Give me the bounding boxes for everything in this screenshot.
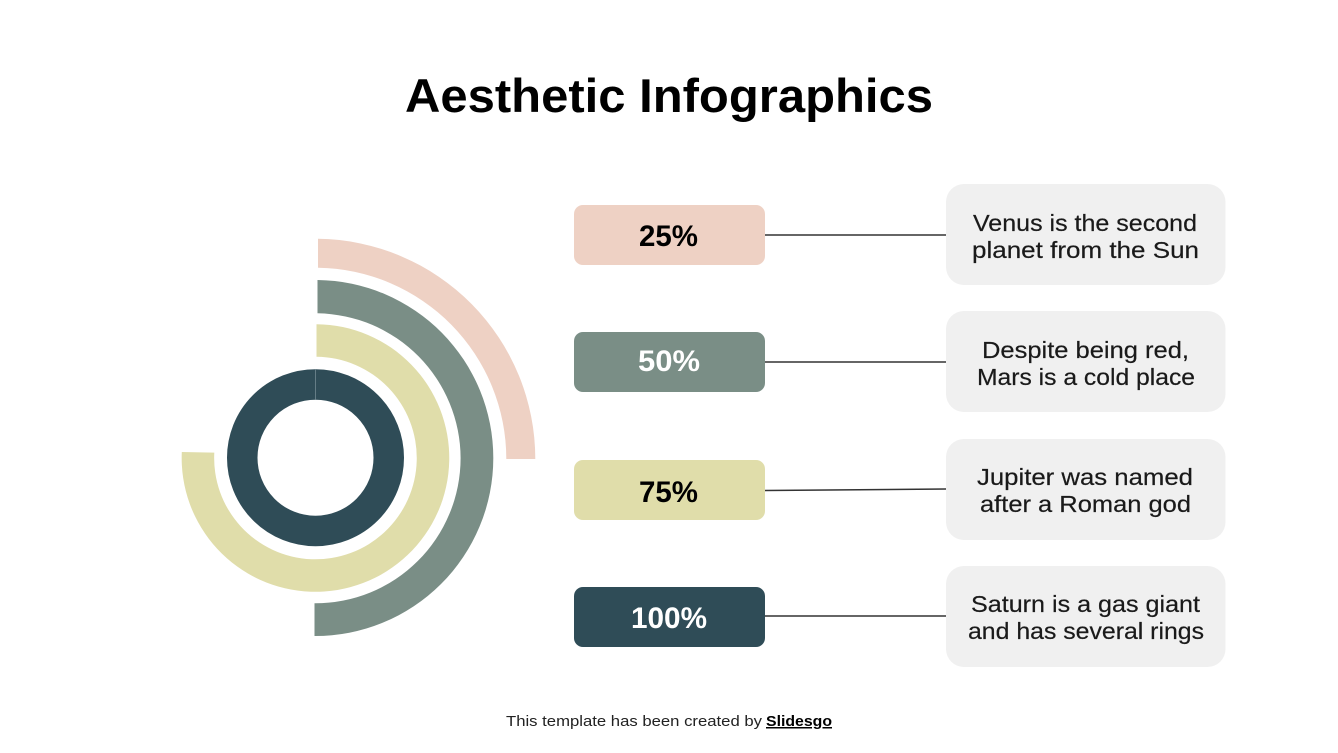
- description text: planet from the Sun: [972, 237, 1199, 263]
- description card: [946, 311, 1226, 412]
- value: 50%: [638, 345, 700, 378]
- value: 75%: [639, 476, 698, 509]
- description text: Saturn is a gas giant: [971, 591, 1201, 617]
- description card: [946, 439, 1226, 540]
- description text: Jupiter was named: [977, 464, 1193, 490]
- description text: after a Roman god: [980, 491, 1191, 517]
- row: 100% Saturn: [574, 566, 1226, 667]
- arc: 75% yellow: [182, 324, 449, 592]
- description text: and has several rings: [968, 618, 1204, 644]
- connector line: [765, 615, 946, 617]
- description text: Venus is the second: [973, 210, 1197, 236]
- description text: Despite being red,: [982, 337, 1189, 363]
- value badge: [574, 460, 765, 520]
- connector line: [765, 234, 946, 236]
- row: 75% Jupiter: [574, 439, 1226, 540]
- connector line: [765, 489, 946, 490]
- title: Aesthetic Infographics: [405, 69, 933, 122]
- value: 25%: [639, 220, 698, 253]
- value badge: [574, 205, 765, 265]
- description card: [946, 184, 1226, 285]
- ring: 100% dark teal: [242, 369, 389, 531]
- description text: Mars is a cold place: [977, 364, 1195, 390]
- footer credit: Slidesgo: [766, 713, 832, 730]
- value badge: [574, 587, 765, 647]
- value badge: [574, 332, 765, 392]
- arc: 50% grey-green: [314, 280, 493, 636]
- row: 25% Venus: [574, 184, 1226, 285]
- value: 100%: [631, 602, 707, 635]
- description text: [977, 464, 1193, 517]
- arc: 25% pink: [318, 239, 535, 459]
- description card: [946, 566, 1226, 667]
- connector line: [765, 361, 946, 363]
- description text: [968, 591, 1204, 644]
- footer credit: This template has been created by: [506, 713, 763, 730]
- description text: [972, 210, 1199, 263]
- description text: [977, 337, 1195, 390]
- row: 50% Mars: [574, 311, 1226, 412]
- radial progress chart: [182, 239, 535, 636]
